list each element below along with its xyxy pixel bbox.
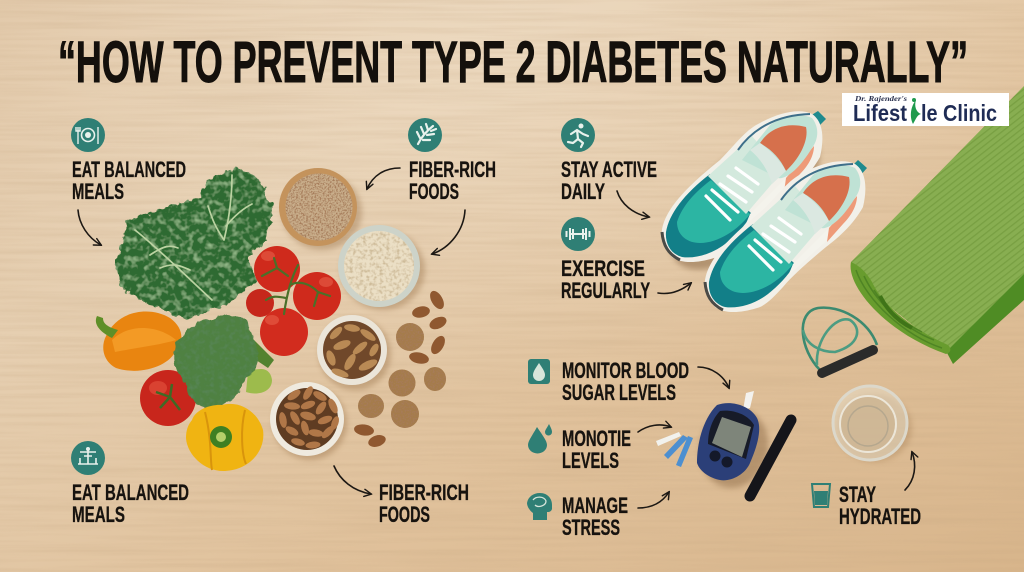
- label: stay active daily: DAILY: [561, 179, 605, 204]
- bowl: quinoa: [279, 168, 362, 250]
- label: exercise regularly: EXERCISE: [561, 256, 645, 281]
- food: kale: [115, 167, 273, 320]
- label: eat balanced meals bottom: [72, 480, 189, 527]
- arrow: fiber to quinoa: [367, 168, 400, 189]
- label: fiber-rich foods bottom: [379, 480, 469, 527]
- icon: dumbbell: [561, 217, 595, 251]
- arrow: stay active to shoes: [617, 191, 649, 217]
- label: stay active daily: STAY ACTIVE: [561, 157, 657, 182]
- lancing pen: [750, 420, 791, 496]
- label: monotie levels: LEVELS: [562, 448, 619, 473]
- label: fiber-rich foods top: FOODS: [409, 179, 459, 204]
- arrow: exercise to shoes: [658, 283, 691, 294]
- food: broccoli: [174, 314, 274, 408]
- label: monitor blood sugar levels: [562, 358, 689, 405]
- water glass: [833, 386, 912, 462]
- label: stay active daily: [561, 157, 657, 204]
- label: manage stress: STRESS: [562, 515, 620, 540]
- food: yellow bell pepper: [186, 404, 263, 471]
- arrow: manage stress to meter: [638, 492, 669, 508]
- label: eat balanced meals top: EAT BALANCED: [72, 157, 186, 182]
- label: monitor blood sugar levels: MONITOR BLOOD: [562, 358, 689, 383]
- food: tomatoes on the vine: [246, 246, 341, 356]
- icon: water drops: [528, 424, 552, 453]
- label: monotie levels: [562, 426, 631, 473]
- icon: head with brain: [527, 493, 552, 520]
- logo: Dr. Rajender's Lifestyle Clinic: [842, 93, 1009, 126]
- food: orange bell pepper: [96, 312, 181, 371]
- label: eat balanced meals top: [72, 157, 186, 204]
- label: eat balanced meals bottom: MEALS: [72, 502, 125, 527]
- label: manage stress: [562, 493, 628, 540]
- icon: wheat: [408, 118, 442, 152]
- arrow: fiber to oats: [432, 210, 465, 254]
- label: eat balanced meals bottom: EAT BALANCED: [72, 480, 189, 505]
- bowl: walnuts: [317, 315, 391, 390]
- label: exercise regularly: REGULARLY: [561, 278, 650, 303]
- icon: glass of water: [812, 484, 830, 507]
- label: fiber-rich foods top: [409, 157, 496, 204]
- label: fiber-rich foods top: FIBER-RICH: [409, 157, 496, 182]
- loose nuts: [353, 289, 448, 449]
- arrow: hydrated to glass: [905, 452, 915, 490]
- bowl: oats: [338, 225, 425, 310]
- food: red tomato left: [140, 370, 196, 426]
- running shoes: [647, 106, 867, 312]
- label: fiber-rich foods bottom: FIBER-RICH: [379, 480, 469, 505]
- arrow: monitor to meter: [698, 367, 729, 388]
- shoe: left: [647, 106, 843, 294]
- label: stay hydrated: HYDRATED: [839, 504, 921, 529]
- glucose meter: [691, 391, 777, 495]
- label: fiber-rich foods bottom: FOODS: [379, 502, 430, 527]
- icon: blood drop square: [528, 359, 550, 384]
- arrow: eat balanced to kale: [78, 210, 101, 245]
- logo: Dr. Rajender's Lifestyle Clinic: le Clinic: [921, 100, 997, 126]
- label: exercise regularly: [561, 256, 650, 303]
- shoe: right: [705, 160, 867, 312]
- bowl: almonds: [270, 382, 347, 460]
- icon: plate and cutlery: [71, 118, 105, 152]
- icon: runner: [561, 118, 595, 152]
- glucose test strips: [656, 432, 693, 467]
- label: monitor blood sugar levels: SUGAR LEVELS: [562, 380, 676, 405]
- label: stay hydrated: [839, 482, 921, 529]
- icon: balance: [71, 441, 105, 475]
- label: monotie levels: MONOTIE: [562, 426, 631, 451]
- label: eat balanced meals top: MEALS: [72, 179, 124, 204]
- label: manage stress: MANAGE: [562, 493, 628, 518]
- resistance band: [803, 308, 877, 373]
- logo: Dr. Rajender's Lifestyle Clinic: Dr. Rajender's: [854, 94, 907, 103]
- logo: Dr. Rajender's Lifestyle Clinic: Lifest: [853, 100, 907, 126]
- label: stay hydrated: STAY: [839, 482, 876, 507]
- arrow: bottom fiber to almonds: [334, 466, 371, 494]
- yoga mat: [851, 86, 1024, 364]
- arrow: monotie to strips: [638, 425, 671, 432]
